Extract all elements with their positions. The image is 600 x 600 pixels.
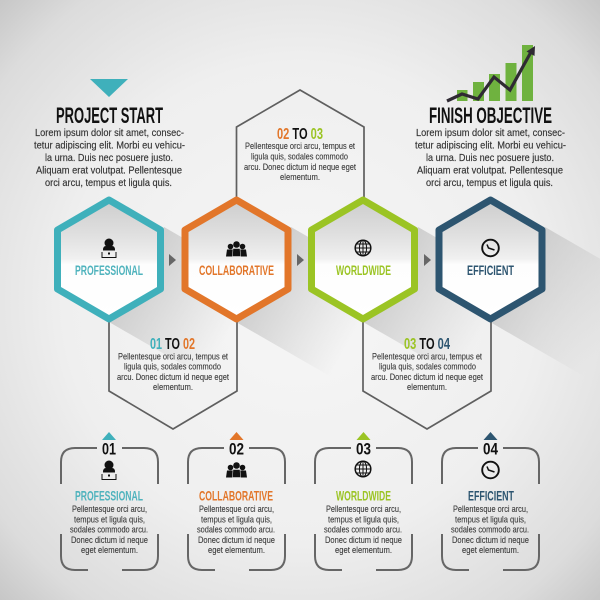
- connector text: 02 to 03: Pellentesque orci arcu, tempus et: [245, 141, 355, 151]
- description: eget elementum.: [208, 545, 265, 555]
- icon: growth bar chart: [447, 45, 535, 101]
- connector text: 01 to 02: Pellentesque orci arcu, tempus et: [118, 352, 228, 362]
- marker triangle: [356, 432, 370, 440]
- marker triangle: [230, 432, 244, 440]
- number: 01: [102, 440, 116, 458]
- connector text: 03 to 04: elementum.: [407, 382, 447, 392]
- icon: team: [226, 241, 247, 256]
- text block: project start: orci arcu, tempus et ligula quis.: [45, 178, 172, 189]
- number: 03: [356, 440, 371, 458]
- description: Pellentesque orci arcu,: [199, 504, 274, 514]
- description: sodales commodo arcu.: [197, 524, 275, 534]
- connector text: 03 to 04: ligula quis, sodales commodo: [379, 362, 476, 372]
- icon: globe: [355, 461, 371, 477]
- label: EFFICIENT: [468, 488, 514, 504]
- number: 02: [229, 440, 244, 458]
- label: worldwide: WORLDWIDE: [336, 262, 391, 278]
- connector text: 01 to 02: [117, 336, 229, 392]
- text block: finish objective: Aliquam erat volutpat. Pellentesque: [417, 166, 563, 176]
- text block: finish objective: orci arcu, tempus et ligula quis.: [426, 178, 553, 189]
- connector text: 03 to 04: arcu. Donec dictum id neque eget: [371, 372, 483, 382]
- hexagon: efficient: [439, 200, 542, 319]
- icon: person at laptop: [102, 460, 116, 480]
- description: [324, 504, 402, 555]
- text block: project start: tetur adipiscing elit. Morbi eu vehicu-: [34, 140, 185, 152]
- connector outline: 03 to 04: [363, 318, 491, 429]
- icon: globe: [355, 240, 371, 256]
- connector text: 02 to 03: elementum.: [280, 172, 320, 182]
- hexagon: professional: [58, 200, 160, 319]
- connector text: 02 to 03: 02 TO 03: [277, 126, 323, 143]
- text block: project start: Lorem ipsum dolor sit amet, consec-: [35, 128, 184, 139]
- description: [451, 504, 529, 555]
- card: worldwide: [315, 432, 412, 570]
- icon: clock: [482, 240, 499, 256]
- description: Donec dictum id neque: [325, 535, 402, 545]
- icon: person at laptop: [102, 238, 116, 258]
- description: sodales commodo arcu.: [451, 524, 529, 534]
- connector text: 01 to 02: 01 TO 02: [150, 336, 195, 353]
- label: COLLABORATIVE: [199, 488, 273, 504]
- description: eget elementum.: [81, 545, 138, 555]
- description: Donec dictum id neque: [198, 535, 275, 545]
- connector outline: 01 to 02: [109, 318, 237, 429]
- connector text: 03 to 04: 03 TO 04: [404, 336, 450, 353]
- connector text: 01 to 02: elementum.: [153, 382, 193, 392]
- text block: project start: [34, 128, 185, 189]
- description: [197, 504, 275, 555]
- connector text: 02 to 03: ligula quis, sodales commodo: [251, 152, 348, 162]
- marker triangle: [102, 432, 116, 440]
- description: tempus et ligula quis,: [455, 514, 526, 524]
- description: Donec dictum id neque: [71, 535, 148, 545]
- label: WORLDWIDE: [336, 488, 391, 504]
- text block: finish objective: tetur adipiscing elit. Morbi eu vehicu-: [415, 140, 566, 152]
- description: Donec dictum id neque: [452, 535, 529, 545]
- label: efficient: EFFICIENT: [467, 262, 514, 278]
- card: professional: [61, 432, 158, 570]
- label: PROFESSIONAL: [75, 488, 143, 504]
- arrow: step 1 to 2: [169, 254, 176, 266]
- card: collaborative: [188, 432, 285, 570]
- marker triangle: [484, 432, 498, 440]
- arrow: step 2 to 3: [297, 254, 304, 266]
- description: sodales commodo arcu.: [324, 524, 402, 534]
- description: eget elementum.: [335, 545, 392, 555]
- description: Pellentesque orci arcu,: [72, 504, 147, 514]
- description: tempus et ligula quis,: [74, 514, 145, 524]
- heading: project start: PROJECT START: [56, 103, 163, 128]
- connector text: 02 to 03: [244, 126, 356, 182]
- arrow: step 3 to 4: [424, 254, 431, 266]
- connector outline: 02 to 03: [236, 90, 364, 198]
- connector text: 03 to 04: Pellentesque orci arcu, tempus et: [372, 352, 482, 362]
- label: collaborative: COLLABORATIVE: [199, 262, 274, 278]
- description: tempus et ligula quis,: [201, 514, 272, 524]
- connector text: 02 to 03: arcu. Donec dictum id neque eget: [244, 162, 356, 172]
- hexagon: collaborative: [185, 200, 288, 319]
- text block: project start: Aliquam erat volutpat. Pellentesque: [36, 166, 182, 176]
- description: [70, 504, 148, 555]
- text block: finish objective: la urna. Duis nec posuere justo.: [426, 153, 554, 164]
- hexagon: worldwide: [312, 200, 414, 319]
- description: eget elementum.: [462, 545, 519, 555]
- label: professional: PROFESSIONAL: [75, 262, 143, 278]
- text block: project start: la urna. Duis nec posuere justo.: [45, 153, 173, 164]
- icon: team: [226, 462, 247, 478]
- connector text: 01 to 02: ligula quis, sodales commodo: [124, 362, 221, 372]
- icon: clock: [482, 462, 499, 478]
- connector text: 03 to 04: [371, 336, 483, 392]
- text block: finish objective: [415, 128, 566, 189]
- text block: finish objective: Lorem ipsum dolor sit amet, consec-: [416, 128, 565, 139]
- description: Pellentesque orci arcu,: [326, 504, 401, 514]
- description: tempus et ligula quis,: [328, 514, 399, 524]
- description: Pellentesque orci arcu,: [453, 504, 528, 514]
- icon: start triangle: [90, 79, 128, 97]
- connector text: 01 to 02: arcu. Donec dictum id neque eget: [117, 372, 229, 382]
- card: efficient: [442, 432, 539, 570]
- number: 04: [483, 440, 498, 458]
- description: sodales commodo arcu.: [70, 524, 148, 534]
